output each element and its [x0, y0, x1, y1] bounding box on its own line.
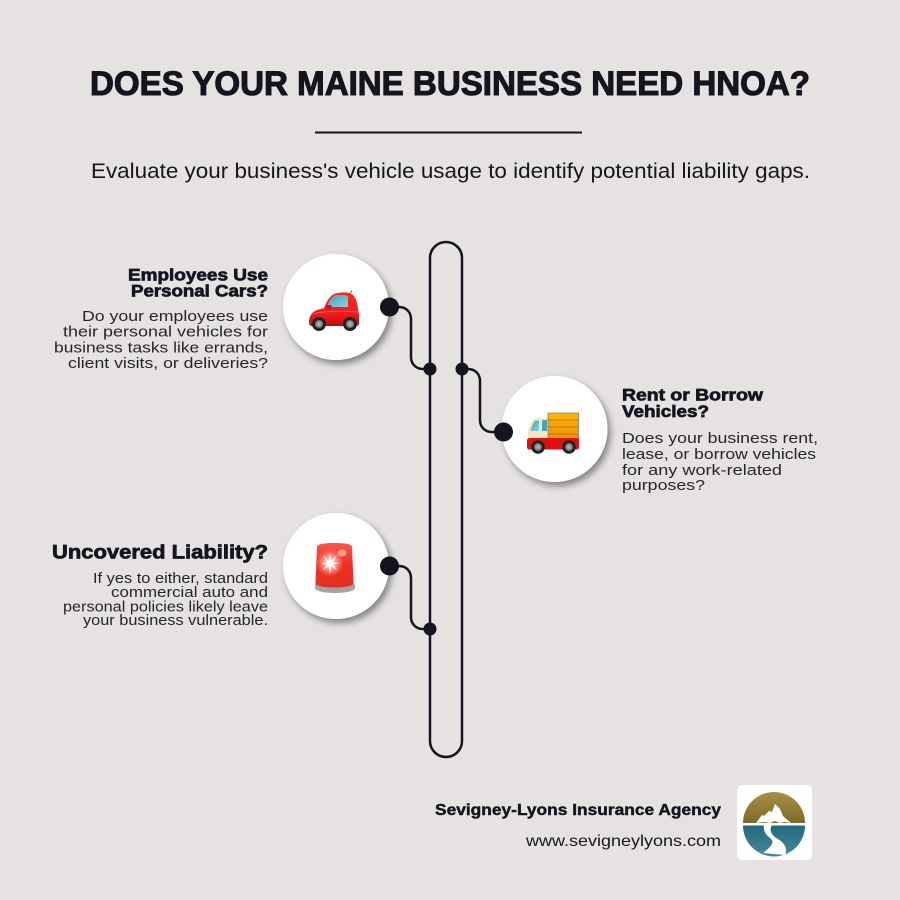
- icon circle: siren: [283, 513, 389, 619]
- body text: uncovered liability: personal policies likely leave: [63, 598, 268, 616]
- heading: employees use personal cars: Employees Use: [128, 266, 268, 284]
- body text: employees: Do your employees use: [82, 308, 268, 325]
- body text: rent or borrow: lease, or borrow vehicles: [622, 446, 816, 463]
- panel: rent or borrow vehicles: [456, 362, 818, 494]
- node: timeline siren: [424, 622, 436, 636]
- body text: rent or borrow: for any work-related: [622, 462, 782, 479]
- title: DOES YOUR MAINE BUSINESS NEED HNOA?: [90, 65, 810, 103]
- icon: delivery truck: [527, 413, 579, 454]
- heading: employees use personal cars: [128, 266, 268, 300]
- body text: employees: [54, 308, 268, 372]
- central timeline pill: [430, 242, 462, 757]
- body text: uncovered liability: If yes to either, standard: [93, 570, 268, 587]
- connector: truck to timeline: [462, 369, 504, 432]
- node: timeline truck: [456, 362, 468, 376]
- node: siren: [380, 556, 399, 576]
- icon circle: truck: [502, 376, 608, 482]
- heading: rent or borrow: [622, 386, 764, 421]
- body text: rent or borrow: Does your business rent,: [622, 430, 818, 447]
- panel: employees use personal cars: [54, 254, 436, 376]
- heading: rent or borrow: Rent or Borrow: [622, 386, 764, 404]
- heading: employees use personal cars: Personal Cars?: [131, 282, 268, 300]
- panel: uncovered liability: [52, 513, 436, 636]
- body text: uncovered liability: [63, 570, 268, 629]
- connector: car to timeline: [389, 307, 430, 369]
- body text: employees: client visits, or deliveries?: [68, 355, 268, 372]
- body text: uncovered liability: your business vulnerable.: [83, 612, 268, 629]
- body text: rent or borrow: [622, 430, 818, 494]
- footer: website: www.sevigneylyons.com: [525, 833, 721, 850]
- body text: rent or borrow: purposes?: [622, 477, 705, 494]
- node: truck: [494, 422, 513, 442]
- heading: uncovered liability: Uncovered Liability?: [52, 542, 268, 564]
- body text: employees: business tasks like errands,: [54, 340, 268, 356]
- connector: siren to timeline: [389, 566, 430, 629]
- body text: uncovered liability: commercial auto and: [111, 584, 268, 601]
- body text: employees: their personal vehicles for: [63, 324, 268, 340]
- subtitle: Evaluate your business's vehicle usage to identify potential liability gaps.: [91, 160, 810, 183]
- node: car: [380, 298, 399, 316]
- heading: rent or borrow: Vehicles?: [622, 402, 709, 421]
- icon: red siren light: [315, 543, 355, 593]
- logo: [737, 785, 812, 860]
- footer: agency name: Sevigney-Lyons Insurance Agency: [435, 802, 721, 819]
- title divider: [315, 132, 582, 134]
- node: timeline car: [424, 362, 436, 376]
- icon circle: car: [283, 254, 389, 360]
- icon: red car: [309, 290, 359, 331]
